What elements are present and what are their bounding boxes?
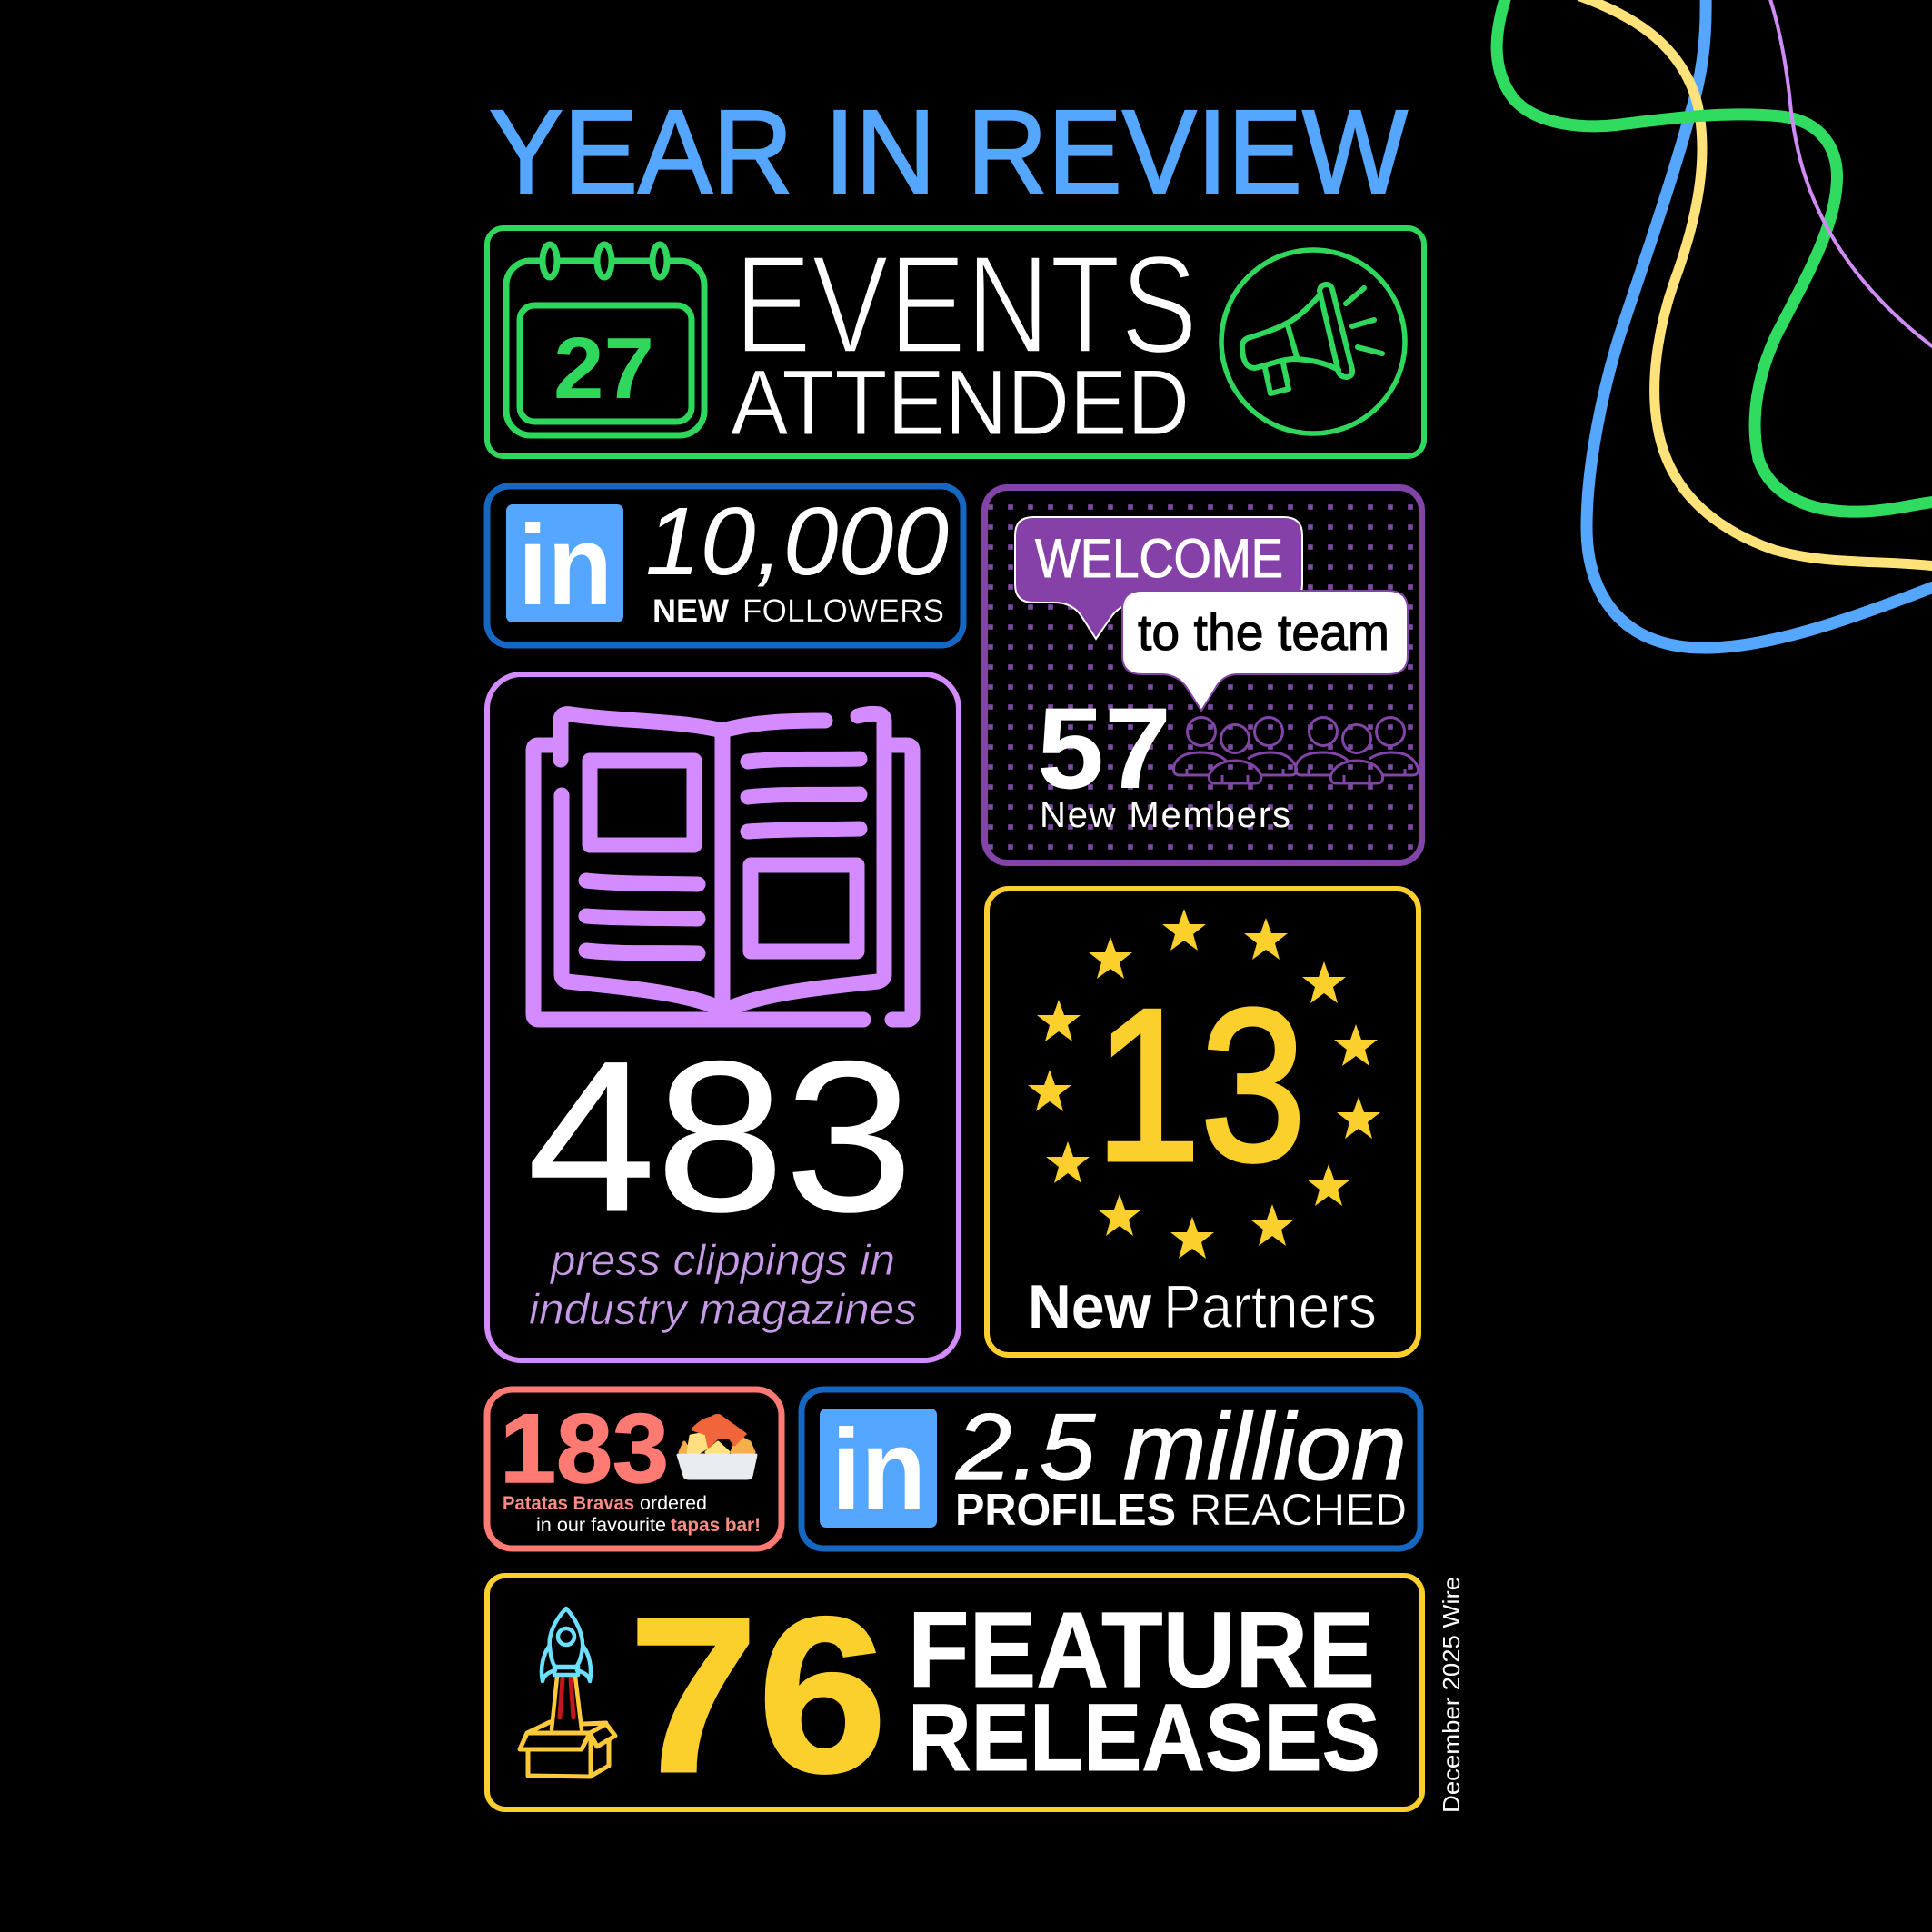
- icon: calendar: [506, 244, 704, 435]
- press caption: [529, 1236, 917, 1333]
- partner label: Partners: [1163, 1272, 1377, 1341]
- reach label: [955, 1486, 1407, 1535]
- press count: 483: [527, 1017, 913, 1257]
- release count: 76: [629, 1572, 887, 1818]
- follower label: FOLLOWERS: [742, 593, 944, 629]
- heading: events: EVENTS: [734, 226, 1198, 383]
- calendar number: 27: [553, 320, 654, 417]
- speech bubble: welcome: [1015, 517, 1302, 639]
- heading: releases: RELEASES: [908, 1685, 1380, 1791]
- panel: press clippings: [487, 674, 959, 1360]
- partner label: New: [1028, 1272, 1152, 1341]
- panel: new members: [985, 487, 1421, 863]
- reach label: REACHED: [1190, 1486, 1407, 1535]
- patatas caption: in our favourite: [536, 1515, 666, 1536]
- title: YEAR IN REVIEW: [489, 85, 1408, 218]
- follower label: NEW: [652, 593, 729, 629]
- patatas caption: ordered: [640, 1493, 707, 1514]
- panel: feature releases: [487, 1572, 1422, 1818]
- icon: star ring: [1028, 909, 1380, 1259]
- panel: LinkedIn profiles reached: [802, 1389, 1420, 1549]
- icon: LinkedIn badge: in: [832, 1407, 926, 1533]
- heading: feature: FEATURE: [908, 1590, 1375, 1710]
- speech bubble: to the team: [1122, 591, 1408, 711]
- panel: patatas bravas: [487, 1389, 782, 1549]
- press caption: industry magazines: [529, 1285, 917, 1333]
- partner count: 13: [1095, 965, 1306, 1206]
- icon: megaphone in circle: [1221, 250, 1405, 433]
- panel: LinkedIn new followers: [487, 486, 963, 645]
- reach figure: 2.5 million: [955, 1395, 1407, 1500]
- icon: bowl of patatas bravas: [678, 1416, 756, 1479]
- patatas caption: tapas bar!: [671, 1515, 761, 1536]
- speech bubble: to the team: to the team: [1138, 603, 1389, 661]
- follower count: 10,000: [645, 488, 949, 595]
- icon: people groups: [1174, 718, 1419, 783]
- footer credit: December 2025 Wire: [1438, 1577, 1465, 1813]
- heading: attended: ATTENDED: [731, 351, 1190, 454]
- member count: 57: [1037, 683, 1171, 812]
- decorative curved lines: [1497, 0, 1932, 648]
- icon: LinkedIn badge: in: [518, 503, 612, 629]
- panel: events attended: [487, 226, 1424, 456]
- reach label: PROFILES: [955, 1486, 1176, 1535]
- partner label: [1028, 1272, 1377, 1341]
- press caption: press clippings in: [549, 1236, 895, 1284]
- icon: rocket launching from box: [520, 1608, 615, 1777]
- follower label: [652, 593, 944, 629]
- member label: New Members: [1040, 795, 1290, 835]
- patatas caption: Patatas Bravas: [503, 1493, 634, 1514]
- patatas count: 183: [500, 1393, 669, 1503]
- speech bubble: welcome: WELCOME: [1035, 528, 1283, 589]
- patatas caption: [503, 1493, 761, 1536]
- icon: open book: [533, 713, 912, 1020]
- panel: new partners: [987, 889, 1419, 1355]
